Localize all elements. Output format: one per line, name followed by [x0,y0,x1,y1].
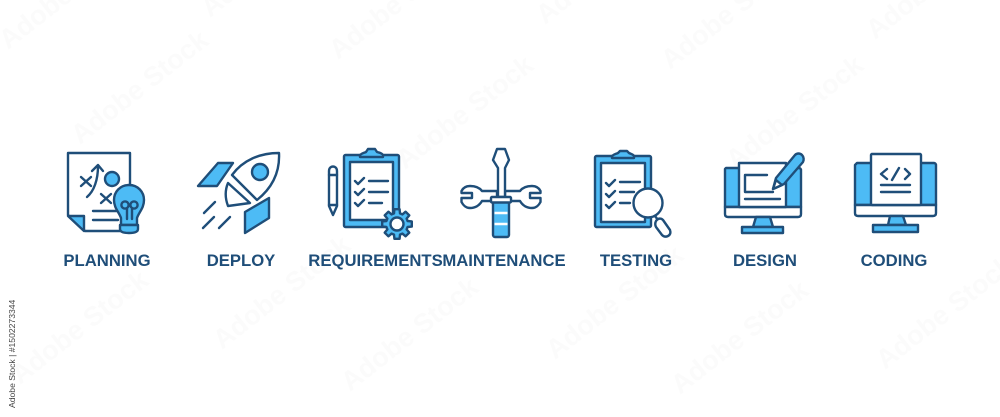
side credit text: Adobe Stock | #1502273344 [7,299,17,408]
icon: coding [855,154,936,232]
watermark pattern: Adobe Stock [665,274,815,400]
watermark pattern: Adobe Stock [390,49,540,175]
watermark pattern: Adobe Stock [65,24,215,150]
label: requirements: REQUIREMENTS [308,251,443,270]
label: deploy: DEPLOY [207,251,275,270]
icon: maintenance [462,149,540,237]
watermark pattern: Adobe Stock [335,271,485,397]
label: planning: PLANNING [63,251,151,270]
watermark pattern: Adobe Stock [720,49,870,175]
label: testing: TESTING [600,251,672,270]
watermark pattern: Adobe Stock [207,229,357,355]
icon: planning [68,153,144,233]
icon: deploy rocket [198,153,279,233]
icon: requirements [329,149,412,239]
watermark pattern: Adobe Stock [5,264,155,390]
watermark pattern: Adobe Stock [540,239,690,365]
icon: testing [595,151,670,237]
label: design: DESIGN [733,251,797,270]
label: coding: CODING [861,251,927,270]
icon: design [725,154,804,233]
label: maintenance: MAINTENANCE [442,251,566,270]
